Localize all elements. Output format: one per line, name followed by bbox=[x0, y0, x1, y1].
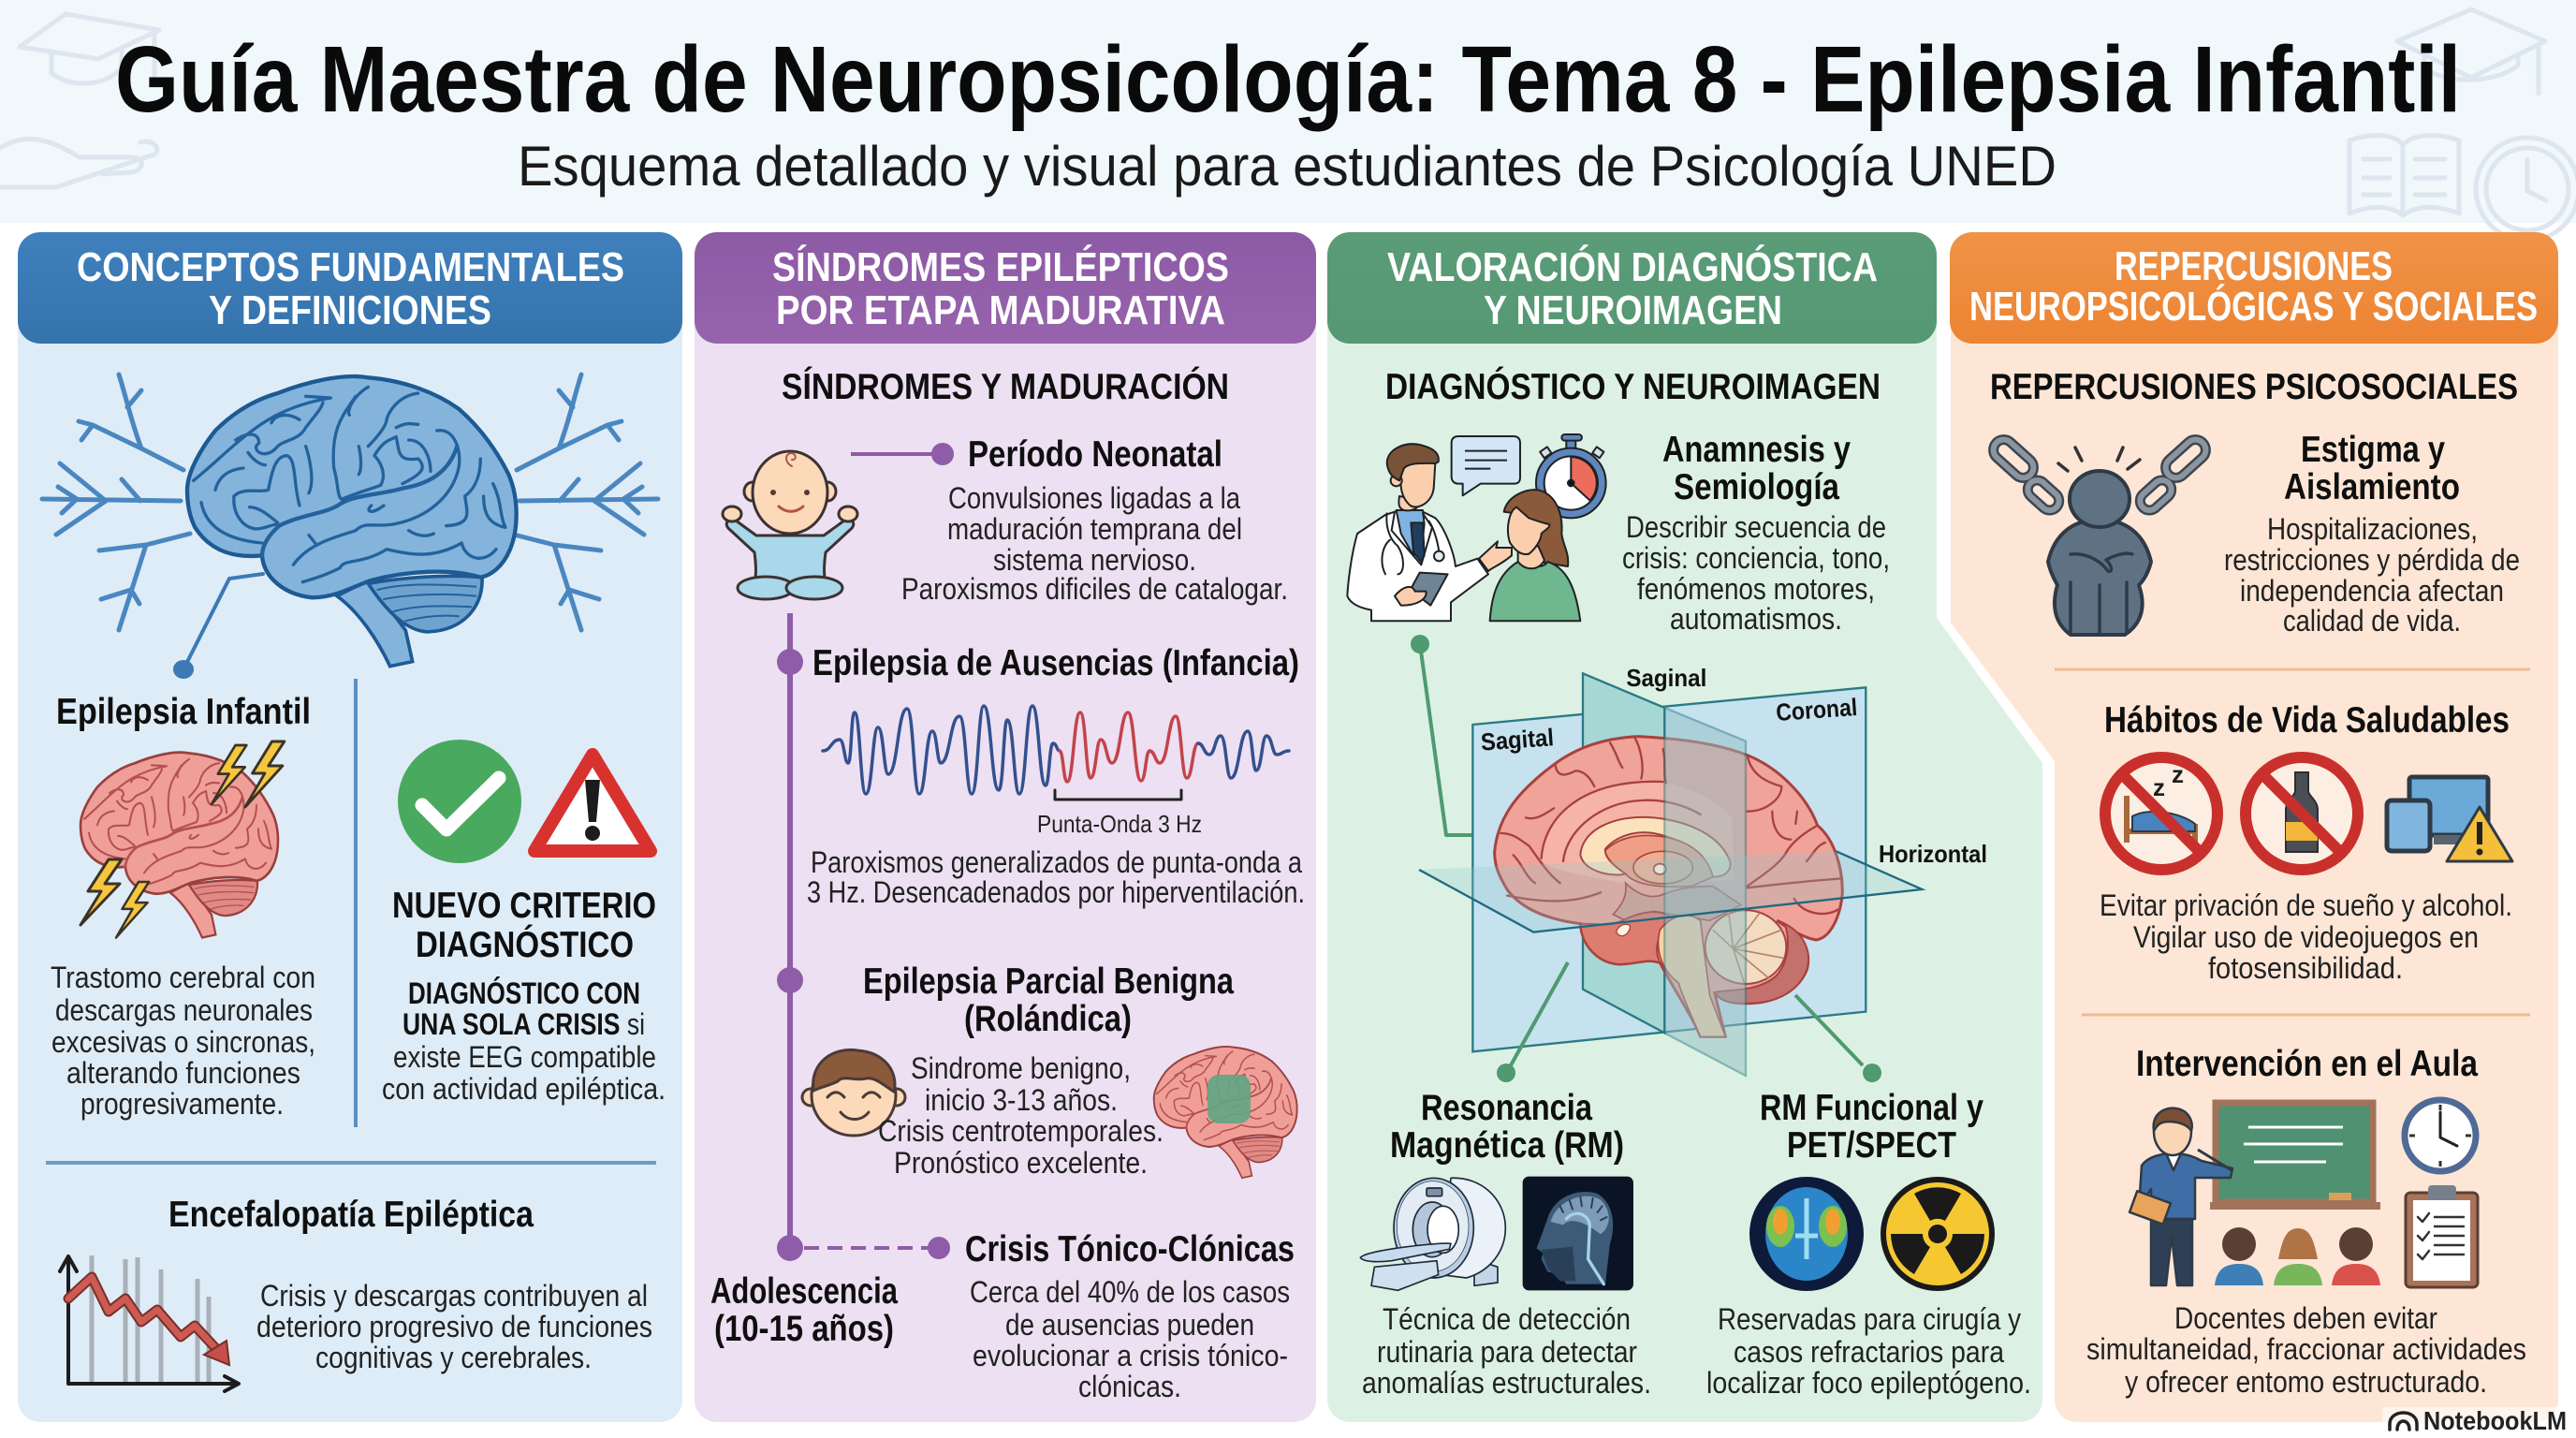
label: sagital: Sagital bbox=[1480, 723, 1555, 756]
heading: anamnesis bbox=[1662, 430, 1851, 507]
heading: anamnesis: Semiología bbox=[1674, 467, 1839, 507]
label: adolescencia: (10-15 años) bbox=[714, 1309, 894, 1349]
label: coronal: Coronal bbox=[1775, 693, 1858, 726]
text: habitos: Vigilar uso de videojuegos en bbox=[2133, 920, 2479, 954]
connector: resonancia bbox=[1497, 962, 1568, 1082]
text: epilepsy definition bbox=[51, 961, 315, 1121]
heading: nuevo criterio: NUEVO CRITERIO bbox=[392, 886, 656, 926]
label: adolescencia: Adolescencia bbox=[710, 1271, 898, 1312]
text: ausencias: Paroxismos generalizados de punta-onda a bbox=[811, 845, 1302, 879]
text: intervencion: Docentes deben evitar bbox=[2174, 1301, 2437, 1335]
text: neonatal: Convulsiones ligadas a la bbox=[948, 481, 1240, 515]
text: estigma: calidad de vida. bbox=[2283, 604, 2461, 638]
text: tonico-clonicas: clónicas. bbox=[1078, 1370, 1181, 1403]
text: resonancia: rutinaria para detectar bbox=[1377, 1335, 1637, 1369]
header: conceptos: Y DEFINICIONES bbox=[209, 287, 491, 333]
text: anamnesis: automatismos. bbox=[1670, 602, 1842, 636]
text: resonancia bbox=[1362, 1302, 1651, 1400]
heading: rolandica: (Rolándica) bbox=[964, 999, 1132, 1039]
heading: resonancia: Resonancia bbox=[1421, 1088, 1592, 1128]
connector: anamnesis to brain bbox=[1411, 635, 1486, 835]
label: adolescencia bbox=[710, 1271, 898, 1349]
icon: screens with warning bbox=[2387, 777, 2512, 861]
text: anamnesis: Describir secuencia de bbox=[1626, 510, 1886, 544]
icon: speech bubble bbox=[1452, 436, 1520, 495]
text: habitos bbox=[2100, 888, 2512, 985]
heading: anamnesis: Anamnesis y bbox=[1662, 430, 1851, 470]
text: intervencion bbox=[2086, 1301, 2526, 1399]
panel: sindromes epilepticos bbox=[695, 232, 1316, 1422]
chart: cognitive decline bbox=[60, 1255, 239, 1391]
text: ausencias bbox=[807, 845, 1305, 909]
icon: blue brain bbox=[187, 376, 517, 667]
heading: sindromes y maduracion: SÍNDROMES Y MADURACIÓN bbox=[782, 366, 1229, 407]
header: conceptos bbox=[18, 232, 682, 344]
icon: chalkboard bbox=[2210, 1103, 2380, 1210]
icon: smiling boy bbox=[802, 1049, 905, 1136]
icon: neural branches bbox=[42, 374, 658, 630]
text: rm funcional: Reservadas para cirugía y bbox=[1718, 1302, 2021, 1336]
text: epilepsy definition: alterando funciones bbox=[66, 1056, 300, 1090]
icon: brain with green focus bbox=[1154, 1047, 1297, 1178]
heading: intervencion: Intervención en el Aula bbox=[2136, 1044, 2478, 1084]
text: epilepsy definition: excesivas o sincronas, bbox=[51, 1025, 315, 1059]
text: rolandica: Crisis centrotemporales. bbox=[878, 1114, 1164, 1148]
connector: brain to epilepsy bbox=[173, 574, 263, 679]
text: habitos: Evitar privación de sueño y alcohol. bbox=[2100, 888, 2512, 922]
text: rm funcional bbox=[1706, 1302, 2031, 1400]
header: valoracion: Y NEUROIMAGEN bbox=[1484, 287, 1782, 333]
text: rolandica bbox=[878, 1051, 1164, 1180]
connector: crisis tonico-clonicas bbox=[804, 1237, 950, 1259]
icon: doctor bbox=[1347, 444, 1512, 621]
heading: rolandica: Epilepsia Parcial Benigna bbox=[863, 961, 1234, 1002]
icon: green check bbox=[398, 740, 521, 863]
text: tonico-clonicas bbox=[970, 1275, 1290, 1403]
icon: sagittal brain bbox=[1495, 737, 1842, 1036]
icon: brain with lightning bbox=[80, 741, 285, 938]
heading: rolandica bbox=[863, 961, 1234, 1039]
text: tonico-clonicas: evolucionar a crisis tónico- bbox=[973, 1339, 1288, 1372]
heading: nuevo criterio: DIAGNÓSTICO bbox=[416, 924, 634, 965]
header: conceptos: CONCEPTOS FUNDAMENTALES bbox=[77, 244, 624, 290]
text: criterio: con actividad epiléptica. bbox=[382, 1072, 666, 1106]
header: valoracion bbox=[1327, 232, 1937, 344]
text: encefalopatia: cognitivas y cerebrales. bbox=[315, 1341, 592, 1374]
subtitle: Esquema detallado y visual para estudiantes de Psicología UNED bbox=[518, 135, 2056, 198]
heading: resonancia bbox=[1390, 1088, 1624, 1166]
text: epilepsy definition: Trastomo cerebral con bbox=[51, 961, 315, 994]
text: rolandica: Pronóstico excelente. bbox=[894, 1146, 1148, 1180]
icon: mri scanner bbox=[1360, 1178, 1505, 1290]
heading: epilepsia infantil: Epilepsia Infantil bbox=[56, 692, 311, 732]
heading: estigma: Aislamiento bbox=[2284, 467, 2460, 507]
text: neonatal: sistema nervioso. bbox=[993, 543, 1196, 577]
text: estigma: independencia afectan bbox=[2240, 574, 2504, 608]
heading: nuevo criterio bbox=[392, 886, 656, 965]
icon: mri image bbox=[1523, 1177, 1633, 1290]
heading: ausencias: Epilepsia de Ausencias (Infancia) bbox=[812, 643, 1299, 683]
text: neonatal bbox=[901, 481, 1288, 606]
text: estigma: restricciones y pérdida de bbox=[2224, 543, 2520, 577]
connector: rm funcional bbox=[1795, 995, 1881, 1082]
text: anamnesis: crisis: conciencia, tono, bbox=[1622, 541, 1890, 575]
icon: radiation bbox=[1883, 1180, 1992, 1288]
icon: clock bbox=[2405, 1100, 2476, 1171]
panel: repercusiones bbox=[1950, 232, 2558, 1422]
text: encefalopatia: Crisis y descargas contribuyen al bbox=[260, 1279, 648, 1313]
heading: encefalopatia: Encefalopatía Epiléptica bbox=[168, 1195, 534, 1235]
icon: doctor, patient, bubble, stopwatch bbox=[1347, 434, 1606, 621]
text: rolandica: inicio 3-13 años. bbox=[925, 1083, 1118, 1117]
heading: resonancia: Magnética (RM) bbox=[1390, 1125, 1624, 1166]
icon: teacher bbox=[2130, 1108, 2232, 1285]
text: criterio: UNA SOLA CRISIS si bbox=[402, 1007, 645, 1041]
heading: rm funcional: RM Funcional y bbox=[1760, 1088, 1983, 1128]
text: habitos: fotosensibilidad. bbox=[2208, 951, 2403, 985]
chart: brain planes bbox=[1419, 664, 1987, 1076]
icon: stopwatch bbox=[1536, 434, 1606, 518]
panel: conceptos fundamentales bbox=[18, 232, 682, 1422]
label: punta-onda: Punta-Onda 3 Hz bbox=[1037, 810, 1202, 838]
text: encefalopatia bbox=[256, 1279, 652, 1374]
text: epilepsy definition: descargas neuronales bbox=[55, 993, 313, 1027]
text: encefalopatia: deterioro progresivo de funciones bbox=[256, 1310, 652, 1343]
heading: diagnostico y neuroimagen: DIAGNÓSTICO Y NEUROIMAGEN bbox=[1385, 366, 1881, 407]
timeline bbox=[777, 613, 803, 1261]
label: horizontal: Horizontal bbox=[1879, 840, 1987, 868]
header: sindromes bbox=[695, 232, 1316, 344]
text: intervencion: simultaneidad, fraccionar actividades bbox=[2086, 1332, 2526, 1366]
text: rolandica: Sindrome benigno, bbox=[911, 1051, 1131, 1085]
text: epilepsy definition: progresivamente. bbox=[80, 1087, 284, 1121]
icon: pet scan bbox=[1749, 1177, 1864, 1291]
icon: baby bbox=[723, 451, 857, 599]
label: saginal: Saginal bbox=[1626, 664, 1706, 692]
heading: estigma: Estigma y bbox=[2301, 430, 2445, 470]
text: anamnesis: fenómenos motores, bbox=[1637, 572, 1875, 606]
text: resonancia: Técnica de detección bbox=[1383, 1302, 1631, 1336]
text: estigma bbox=[2224, 512, 2520, 638]
heading: rm funcional: PET/SPECT bbox=[1787, 1125, 1956, 1166]
text: criterio: existe EEG compatible bbox=[393, 1040, 656, 1074]
icon: students bbox=[2215, 1227, 2380, 1285]
heading: habitos: Hábitos de Vida Saludables bbox=[2104, 700, 2510, 741]
text: criterio bbox=[382, 976, 666, 1106]
icon: patient bbox=[1490, 490, 1580, 621]
text: intervencion: y ofrecer entomo estructurado. bbox=[2125, 1365, 2487, 1399]
text: neonatal: maduración temprana del bbox=[947, 512, 1242, 546]
icon: clipboard bbox=[2406, 1185, 2478, 1287]
icon: broken chains and person bbox=[1989, 435, 2210, 635]
connector: neonatal bbox=[851, 443, 954, 465]
header: sindromes: SÍNDROMES EPILÉPTICOS bbox=[772, 243, 1229, 290]
heading: crisis tonico-clonicas: Crisis Tónico-Clónicas bbox=[965, 1229, 1295, 1269]
icon: warning triangle bbox=[534, 755, 651, 851]
text: criterio: DIAGNÓSTICO CON bbox=[408, 976, 640, 1010]
heading: estigma bbox=[2284, 430, 2460, 507]
text: tonico-clonicas: de ausencias pueden bbox=[1005, 1308, 1254, 1342]
header: repercusiones bbox=[1950, 232, 2558, 344]
icon: no sleep bbox=[2105, 757, 2217, 870]
header background bbox=[0, 0, 2576, 223]
icon: no sleep: z bbox=[2172, 760, 2184, 788]
text: estigma: Hospitalizaciones, bbox=[2267, 512, 2478, 546]
icon: no sleep: z bbox=[2153, 773, 2165, 801]
text: rm funcional: casos refractarios para bbox=[1734, 1335, 2004, 1369]
text: resonancia: anomalías estructurales. bbox=[1362, 1366, 1651, 1400]
text: tonico-clonicas: Cerca del 40% de los casos bbox=[970, 1275, 1290, 1309]
icon: no alcohol bbox=[2246, 757, 2358, 870]
chart: eeg wave bbox=[823, 706, 1289, 800]
heading: rm funcional bbox=[1760, 1088, 1983, 1166]
text: rm funcional: localizar foco epileptógeno. bbox=[1706, 1366, 2031, 1400]
header: repercusiones: REPERCUSIONES bbox=[2115, 243, 2393, 289]
heading: periodo neonatal: Período Neonatal bbox=[968, 434, 1222, 475]
header: valoracion: VALORACIÓN DIAGNÓSTICA bbox=[1387, 243, 1878, 290]
text: anamnesis bbox=[1622, 510, 1890, 636]
header: sindromes: POR ETAPA MADURATIVA bbox=[776, 287, 1225, 333]
decorative header icons bbox=[0, 9, 2576, 241]
text: ausencias: 3 Hz. Desencadenados por hiperventilación. bbox=[807, 875, 1305, 909]
text: neonatal: Paroxismos dificiles de catalogar. bbox=[901, 572, 1288, 606]
panel: valoracion diagnostica bbox=[1327, 232, 2042, 1422]
